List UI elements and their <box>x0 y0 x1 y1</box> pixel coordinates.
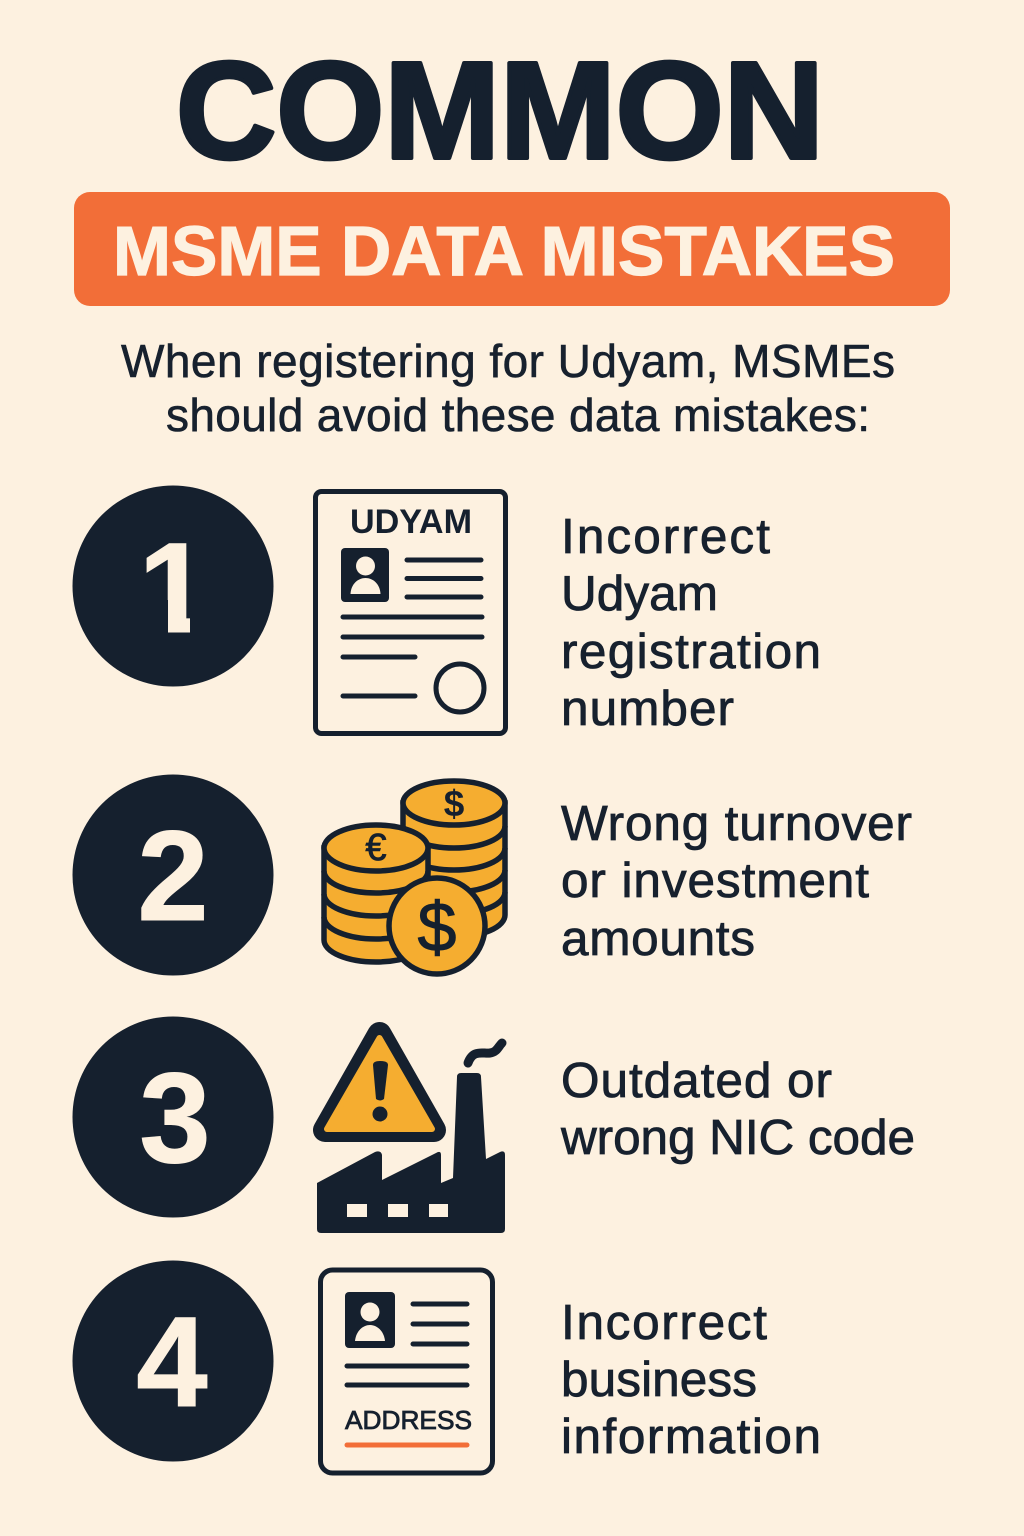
icon: Udyam document <box>316 492 506 734</box>
icon: address document <box>320 1270 492 1473</box>
number badge 4: 4 <box>136 1291 208 1434</box>
number badge 2: 2 <box>137 805 209 948</box>
text: mistake 3: wrong NIC code <box>560 1110 915 1165</box>
icon: Udyam document: UDYAM <box>350 503 472 541</box>
text: mistake 2: amounts <box>561 911 755 966</box>
panel: mistake 4 <box>72 1260 821 1473</box>
number badge 2 <box>72 774 274 976</box>
banner: MSME data mistakes <box>74 192 950 306</box>
icon: address document: ADDRESS <box>345 1405 472 1435</box>
number badge 4 <box>72 1260 274 1462</box>
icon: coin stacks: $ <box>418 888 456 966</box>
intro text <box>121 335 895 441</box>
text: mistake 1 <box>561 509 821 736</box>
intro text: When registering for Udyam, MSMEs <box>121 335 895 387</box>
intro text: should avoid these data mistakes: <box>166 389 870 441</box>
icon: coin stacks: $ <box>444 783 465 824</box>
text: mistake 1: number <box>561 681 734 736</box>
icon: coin stacks: € <box>365 827 387 869</box>
panel: mistake 3 <box>72 1016 915 1233</box>
text: mistake 4: Incorrect <box>561 1295 767 1350</box>
number badge 1 <box>72 486 274 686</box>
banner: MSME data mistakes: MSME DATA MISTAKES <box>113 212 895 290</box>
panel: mistake 1 <box>72 486 821 736</box>
text: mistake 2: or investment <box>561 853 869 908</box>
icon: warning triangle and factory <box>317 1034 505 1233</box>
number badge 3 <box>72 1016 274 1218</box>
text: mistake 1: registration <box>561 624 821 679</box>
text: mistake 2: Wrong turnover <box>561 796 912 851</box>
text: mistake 1: Incorrect <box>561 509 770 564</box>
text: mistake 2 <box>561 796 912 966</box>
number badge 3: 3 <box>139 1047 211 1190</box>
panel: mistake 2 <box>72 774 912 976</box>
text: mistake 3 <box>560 1053 915 1165</box>
text: mistake 1: Udyam <box>561 566 718 621</box>
number badge 1: 1 <box>138 517 210 660</box>
text: mistake 4 <box>561 1295 821 1464</box>
text: mistake 4: information <box>561 1409 821 1464</box>
text: mistake 4: business <box>561 1352 757 1407</box>
icon: coin stacks <box>324 781 505 974</box>
title: COMMON <box>176 34 824 188</box>
text: mistake 3: Outdated or <box>561 1053 832 1108</box>
